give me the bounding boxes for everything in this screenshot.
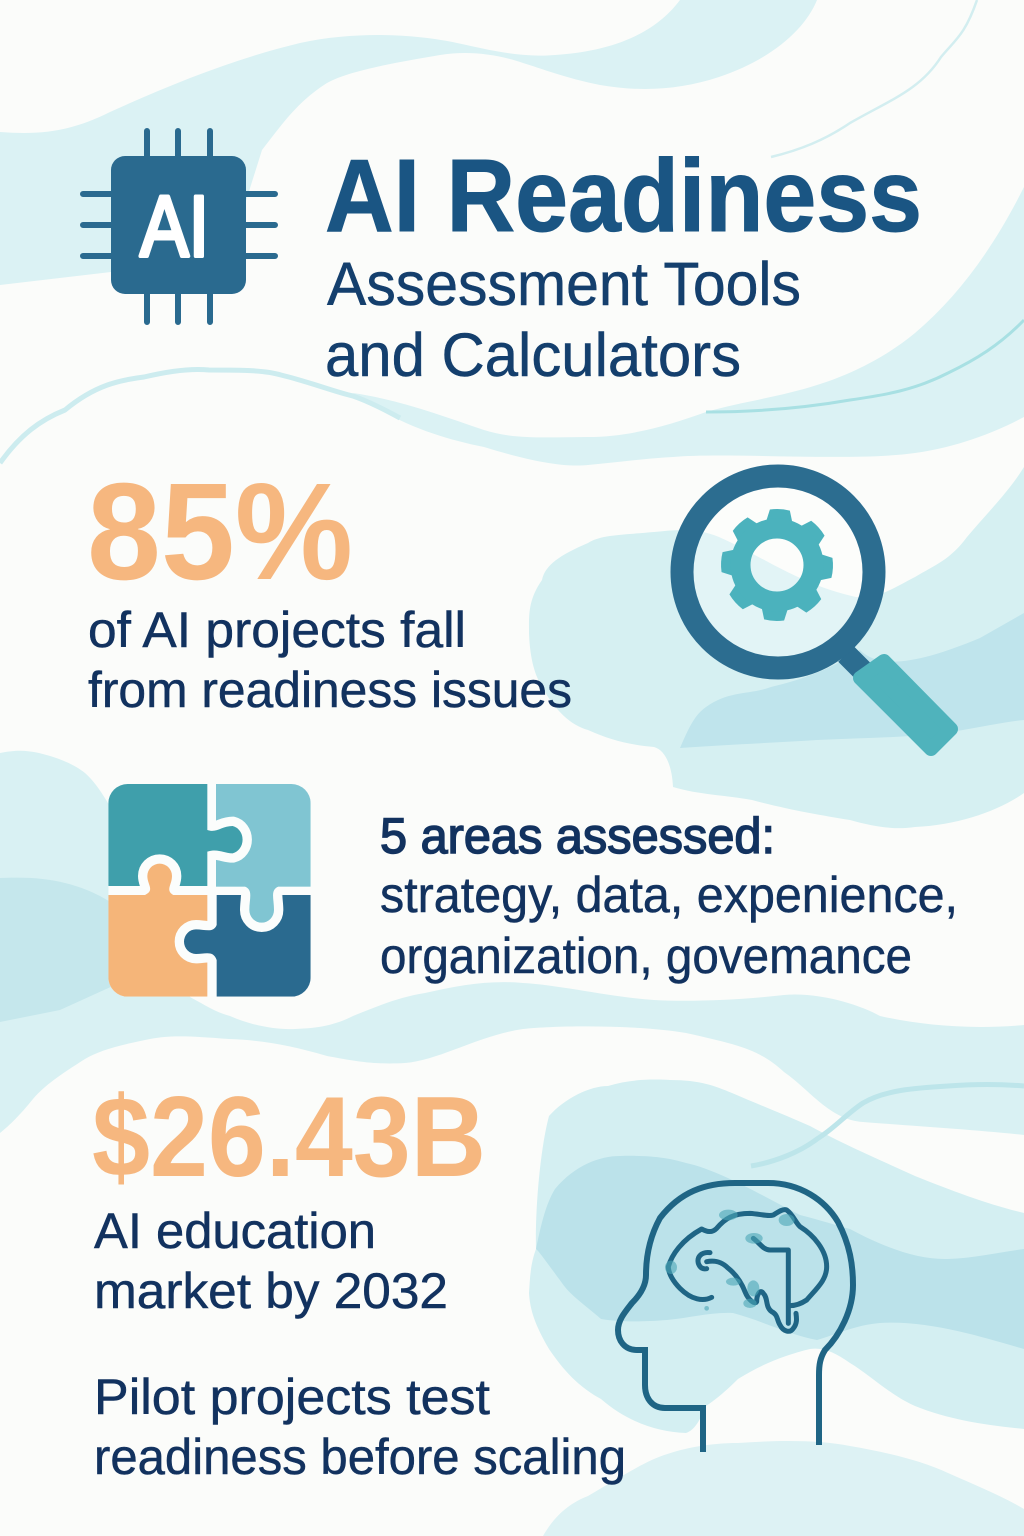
icon: AI chip bbox=[83, 131, 275, 322]
subtitle: and Calculators bbox=[325, 321, 741, 389]
icon: brain bbox=[665, 1210, 827, 1331]
text: AI education market: AI education bbox=[94, 1203, 376, 1259]
icon: head with brain bbox=[618, 1183, 853, 1452]
title: AI Readiness bbox=[325, 138, 922, 253]
text: 5 areas assessed: organization, govemance bbox=[380, 928, 912, 984]
icon: puzzle bbox=[108, 784, 311, 997]
subtitle bbox=[325, 250, 801, 389]
text: readiness issues: from readiness issues bbox=[88, 662, 572, 718]
text: 5 areas assessed bbox=[380, 808, 958, 984]
text: readiness issues bbox=[88, 602, 572, 718]
text: AI education market bbox=[94, 1203, 448, 1319]
text: 5 areas assessed: strategy, data, expenience, bbox=[380, 867, 958, 923]
subtitle: Assessment Tools bbox=[327, 250, 801, 318]
icon: magnifying glass with gear bbox=[682, 476, 951, 749]
stat: $26.43B: $26.43B bbox=[92, 1074, 486, 1201]
text: pilot projects: Pilot projects test bbox=[94, 1369, 490, 1425]
text: pilot projects bbox=[94, 1369, 626, 1485]
icon: gear bbox=[720, 508, 834, 622]
icon: AI chip: AI bbox=[140, 179, 209, 275]
text: AI education market: market by 2032 bbox=[94, 1263, 448, 1319]
text: pilot projects: readiness before scaling bbox=[94, 1429, 626, 1485]
stat: 85%: 85% bbox=[87, 455, 353, 609]
text: readiness issues: of AI projects fall bbox=[88, 602, 466, 658]
text: 5 areas assessed: 5 areas assessed: bbox=[380, 808, 775, 864]
